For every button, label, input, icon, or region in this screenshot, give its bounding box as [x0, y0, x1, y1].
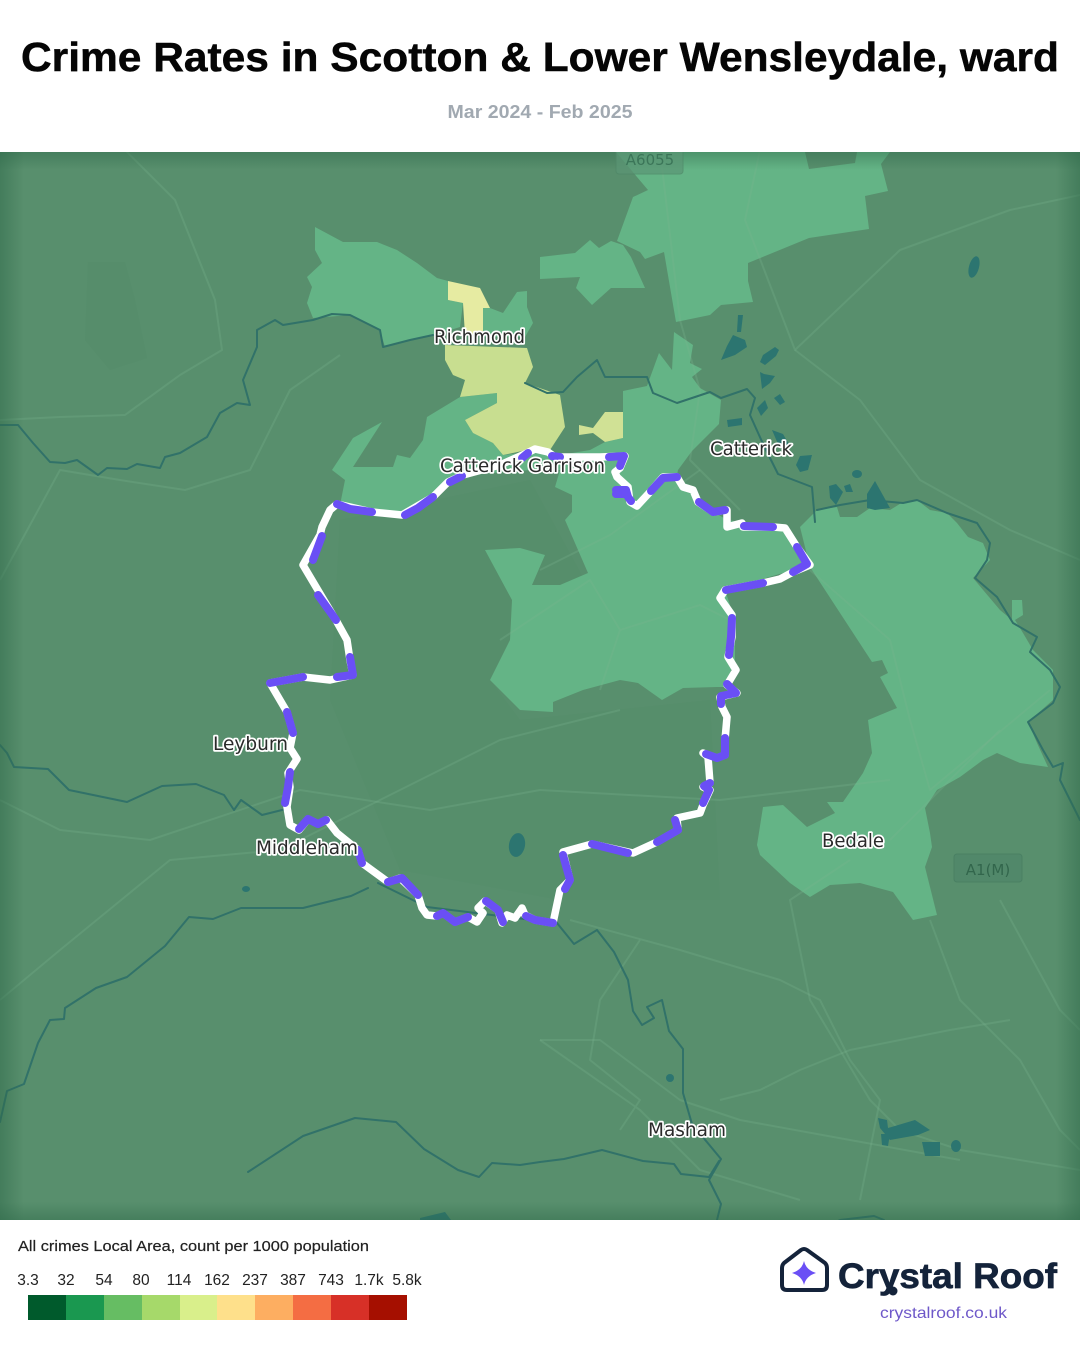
- legend scale values: 80: [132, 1272, 150, 1289]
- road shield: A1(M): A1(M): [966, 861, 1010, 879]
- legend scale values: 5.8k: [392, 1272, 422, 1289]
- brand name: Crystal Roof: [838, 1257, 1057, 1296]
- road shield: A1(M): [954, 854, 1022, 882]
- legend scale values: 114: [167, 1272, 192, 1289]
- legend scale values: 54: [95, 1272, 113, 1289]
- map vignette: [0, 152, 1080, 1220]
- legend scale values: 162: [204, 1272, 230, 1289]
- road shield: A6055: [616, 152, 684, 174]
- place label: Richmond: Richmond: [434, 326, 525, 348]
- rivers: [0, 314, 1080, 1222]
- ward boundary: Scotton & Lower Wensleydale: [270, 449, 810, 923]
- place label: Leyburn: Leyburn: [213, 733, 288, 755]
- legend scale values: 387: [280, 1272, 306, 1289]
- legend scale values: 743: [318, 1272, 344, 1289]
- place label: Catterick: Catterick: [710, 438, 792, 460]
- place label: Middleham: Middleham: [256, 837, 358, 859]
- legend scale values: 32: [57, 1272, 75, 1289]
- purple dashes: [270, 453, 807, 923]
- brand url: crystalroof.co.uk: [880, 1305, 1008, 1322]
- road shield: A6055: A6055: [626, 151, 674, 169]
- legend scale values: 1.7k: [354, 1272, 384, 1289]
- title: Crime Rates in Scotton & Lower Wensleydale, ward: [21, 34, 1059, 80]
- legend colour bar: [28, 1295, 407, 1320]
- legend: [17, 1238, 422, 1320]
- legend scale values: 3.3: [17, 1272, 39, 1289]
- brand mark: key dot on the y: [888, 1286, 898, 1296]
- choropleth areas: light green local areas: [307, 152, 1053, 920]
- water bodies: [242, 255, 982, 1220]
- brand logo: Crystal Roof: [782, 1249, 1057, 1322]
- choropleth areas: yellow higher crime areas: [445, 281, 623, 455]
- place label: Catterick Garrison: Catterick Garrison: [440, 455, 605, 477]
- subtitle: date range: Mar 2024 - Feb 2025: [448, 102, 632, 122]
- roads: [0, 150, 1080, 1200]
- legend scale values: 237: [242, 1272, 268, 1289]
- place label: Bedale: Bedale: [822, 830, 884, 852]
- legend title: All crimes Local Area, count per 1000 population: [18, 1238, 369, 1255]
- legend scale values: [17, 1272, 422, 1289]
- place label: Masham: Masham: [648, 1119, 726, 1141]
- icon: house with star: [782, 1249, 827, 1290]
